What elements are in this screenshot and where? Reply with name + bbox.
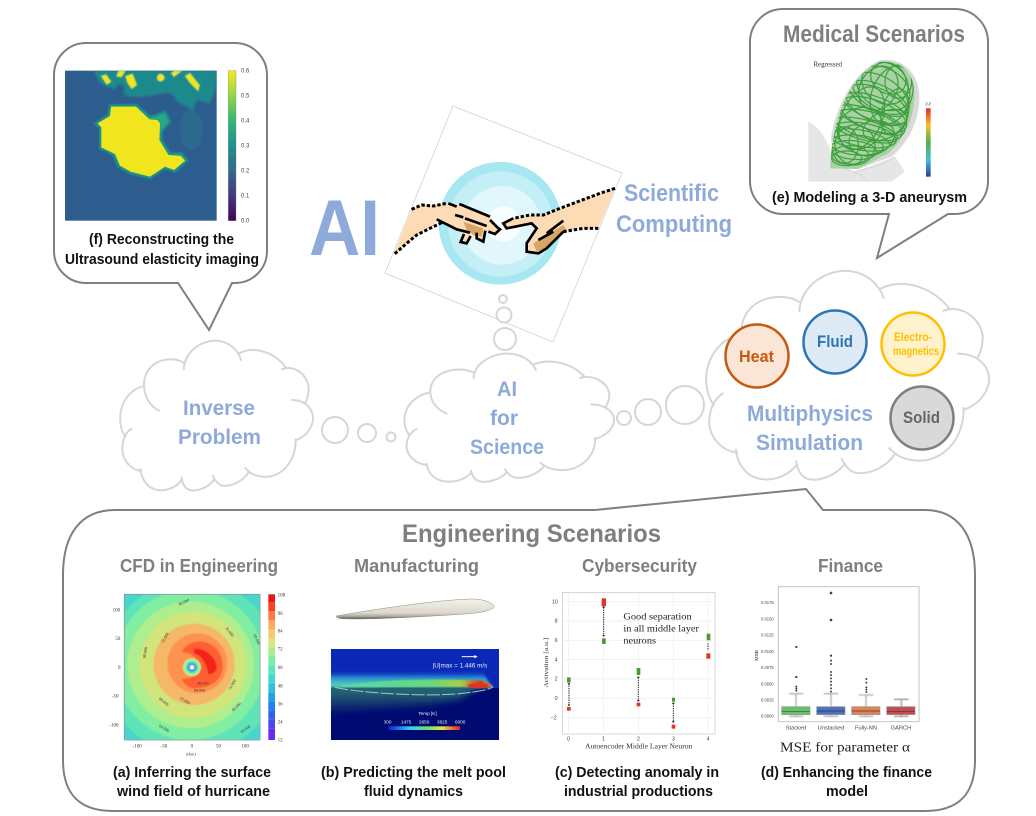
caption: f: (f) Reconstructing the [89,232,234,248]
tick labels: 0.0100 [761,649,774,654]
axes labels: 3 [672,736,675,742]
subheading: Finance: Finance [818,556,883,576]
colorbar: 24 [278,720,283,725]
speech bubble: medical scenarios [750,9,988,258]
contour labels: 60.000 [178,598,190,607]
axis ticks: r(km) [186,752,196,757]
axes labels: −2 [551,715,557,721]
outliers [795,592,867,693]
axes labels: 1 [602,736,605,742]
heading: engineering scenarios: Engineering Scenarios [402,520,661,548]
axes labels: 4 [707,736,710,742]
axis ticks: 50 [216,745,221,750]
circle: fluid: Fluid [817,332,853,351]
colorbar: 84 [278,630,283,635]
whiskers [789,693,909,716]
contour labels [142,598,261,734]
circle: electromagnetics: magnetics [893,344,939,358]
axes labels: 8 [555,619,558,625]
subheading: Cybersecurity: Cybersecurity [582,556,697,576]
chart subtitle: MSE for parameter α [780,740,911,755]
chart: finance MSE boxplot: Unstacked [818,726,844,732]
heading: medical scenarios: Medical Scenarios [783,21,965,48]
label: AI for Science [470,378,544,459]
colorbar: 0.3 [241,144,250,150]
contour labels: 54.000 [158,724,170,733]
caption: c [555,765,719,800]
circle: electromagnetics [882,312,944,376]
contour labels: 72.000 [179,696,191,705]
caption: a [113,765,271,800]
colorbar: 36 [278,703,283,708]
chart: finance MSE boxplot: MSE [754,649,760,661]
label: multiphysics simulation [747,401,873,455]
axis ticks [109,609,249,757]
contour labels: 60.000 [252,634,261,646]
colorbar: P-P [925,101,932,106]
annotation: neurons [623,635,656,646]
axes labels: 0 [555,696,558,702]
tick labels [761,600,774,719]
caption: b: (b) Predicting the melt pool [321,765,506,781]
caption: f [65,232,259,268]
tick labels: 0.0125 [761,633,774,638]
axis ticks: 100 [113,609,121,614]
illustration: creation of AI hands [385,106,622,342]
chart: finance MSE boxplot [754,587,919,755]
contour labels: 96.000 [197,681,209,685]
caption: d: model [826,784,868,800]
cloud: multiphysics simulation [706,271,989,480]
caption: d: (d) Enhancing the finance [761,765,932,781]
cloud: inverse problem [120,341,313,490]
panel: engineering scenarios [63,489,975,811]
circle: heat [726,324,788,388]
colorbar: 72 [278,648,283,653]
label: inverse problem: Inverse [183,397,255,420]
simulation field: 1475 [401,719,412,724]
axes labels: 4 [555,657,558,663]
chart: autoencoder activation: Autoencoder Middle Layer Neuron [585,741,693,750]
chart: aneurysm streamlines: Regressed [813,61,843,69]
caption: c: industrial productions [564,784,713,800]
axes labels: 10 [552,599,558,605]
axes labels [551,599,710,742]
chart: autoencoder activation [543,592,715,750]
contour labels: 84.000 [194,689,205,693]
thought bubbles: AI for Science to inverse problem [322,417,396,443]
text: scientific computing [616,180,732,238]
caption: e: (e) Modeling a 3-D aneurysm [772,190,967,206]
contour labels: 60.000 [142,647,148,659]
whiskers [569,607,708,722]
right hand [503,188,615,253]
caption: f: Ultrasound elasticity imaging [65,252,259,268]
axes labels: 2 [555,677,558,683]
colorbar: 0.1 [241,194,250,200]
annotation: in all middle layer [623,624,700,635]
left hand [393,203,500,255]
annotation [623,612,700,646]
colorbar: 0.4 [241,119,250,125]
axis ticks: -50 [161,745,168,750]
label: inverse problem [178,397,261,449]
simulation field [331,649,499,740]
simulation field: 2650 [419,719,430,724]
colorbar [228,69,250,225]
colorbar: 60 [278,666,283,671]
circle: fluid [804,310,866,374]
colorbar: 0.6 [241,69,250,75]
boxes [782,707,915,715]
axis ticks: 100 [241,745,249,750]
colorbar: 108 [278,594,286,599]
tick labels: 0.0150 [761,616,774,621]
simulation field: 300 [384,719,392,724]
label: inverse problem: Problem [178,426,261,449]
caption: a: wind field of hurricane [116,784,270,800]
contour labels: 72.000 [224,626,234,638]
contour labels: 60.000 [231,702,242,712]
colorbar: 0.0 [241,219,250,225]
caption: b: fluid dynamics [364,784,463,800]
simulation field: Temp [K] [418,711,437,716]
simulation field: 6000 [455,719,466,724]
thought bubbles: hands to AI for Science [494,295,516,350]
caption: d [761,765,932,800]
contour labels: 54.000 [240,724,251,734]
chart: autoencoder activation: Activation [a.u.] [543,638,550,688]
caption: b [321,765,506,800]
caption: a: (a) Inferring the surface [113,765,271,781]
colorbar: 96 [278,612,283,617]
axis ticks: -50 [112,695,119,700]
caption: c: (c) Detecting anomaly in [555,765,719,781]
speech bubble: ultrasound elasticity imaging [54,43,267,330]
tick labels: 0.0050 [761,681,774,686]
label: AI for Science: for [490,407,518,430]
contour labels: 72.000 [161,632,170,644]
chart: finance MSE boxplot: GARCH [891,726,911,732]
axis ticks: 0 [118,666,121,671]
subheading: Manufacturing: Manufacturing [354,556,479,576]
axes labels: 6 [555,638,558,644]
thought bubbles: AI for Science to multiphysics [617,386,704,425]
axes labels: 0 [567,736,570,742]
axis ticks: 50 [115,637,121,642]
chart: melt pool [331,598,499,740]
colorbar: 12 [278,739,283,744]
axis ticks: -100 [133,745,142,750]
label: AI for Science: AI [497,378,517,401]
circle: solid: Solid [903,408,940,427]
label: multiphysics simulation: Multiphysics [747,401,873,426]
text: scientific computing: Scientific [624,180,719,207]
axis ticks: 0 [191,745,194,750]
colorbar: 48 [278,684,283,689]
tick labels: 0.0175 [761,600,774,605]
circle: heat: Heat [739,347,774,366]
label: AI for Science: Science [470,436,544,459]
colorbar: 0.5 [241,94,250,100]
colorbar [268,594,286,744]
chart: elasticity heatmap [65,69,250,225]
chart: finance MSE boxplot: Fully-NN [855,726,877,732]
big text: AI: AI [309,183,380,272]
cloud: AI for Science [404,354,614,482]
data points [567,598,710,729]
chart: hurricane wind field [110,593,285,756]
subheading: CFD in Engineering: CFD in Engineering [120,556,278,576]
axes labels: 2 [637,736,640,742]
annotation: Good separation [623,612,692,623]
tick labels: 0.0025 [761,697,774,702]
label: multiphysics simulation: Simulation [756,430,863,455]
colorbar: 0.2 [241,169,250,175]
chart: finance MSE boxplot: Stacked [786,726,806,732]
contour labels: 60.000 [158,697,169,707]
wing shape [336,599,494,619]
tick labels: 0.0000 [761,714,774,719]
text: scientific computing: Computing [616,211,732,238]
tick labels: 0.0075 [761,665,774,670]
simulation field: 3825 [437,719,448,724]
chart: aneurysm streamlines [808,54,932,182]
simulation field: |U|max = 1.446 m/s [433,664,487,670]
axis ticks: -100 [109,724,119,729]
circle: solid [890,386,954,450]
circle: electromagnetics: Electro- [894,330,932,344]
contour labels: 72.000 [228,679,237,690]
